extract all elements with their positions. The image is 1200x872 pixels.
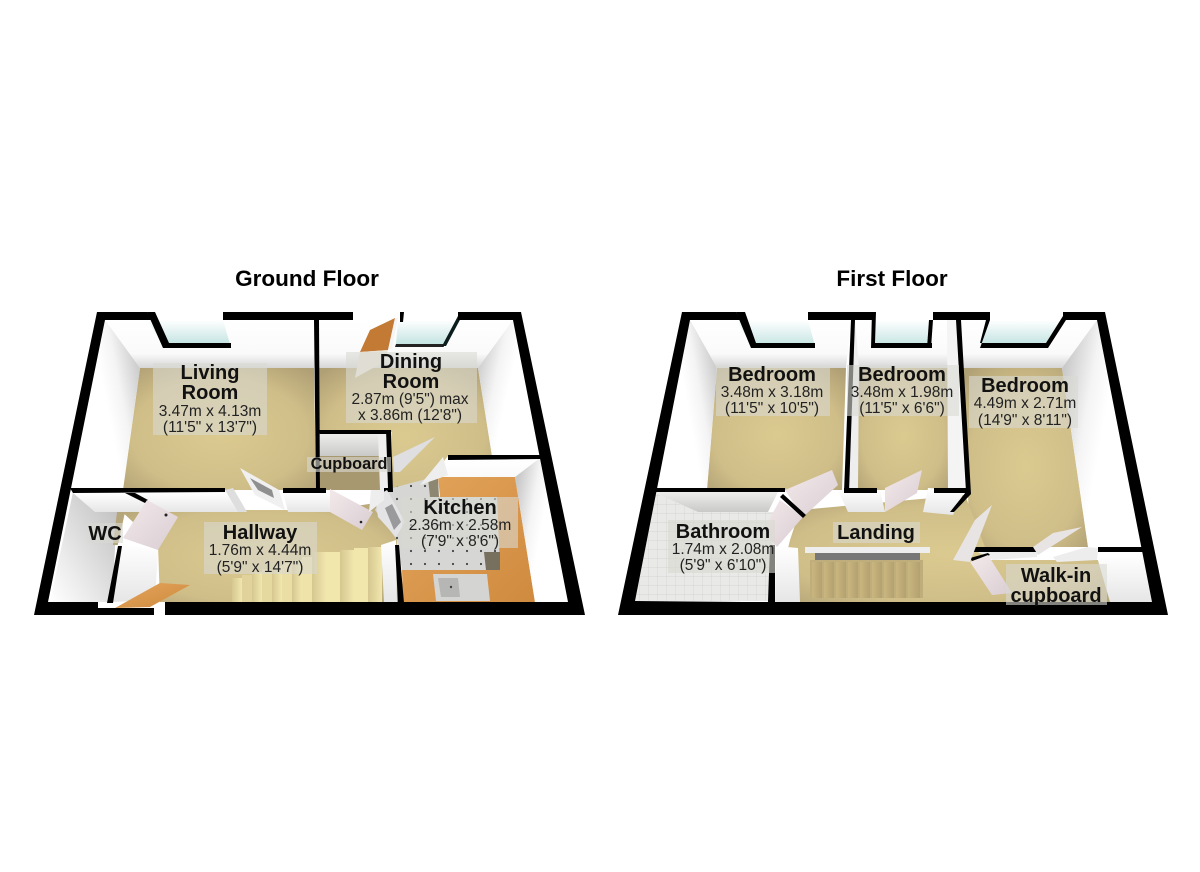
label: Living Room: 3.47m x 4.13m (159, 403, 261, 420)
door: bedroom left (785, 470, 838, 517)
outer and internal walls (34, 312, 585, 615)
window: bedroom right (981, 320, 1063, 344)
room: Kitchen (375, 458, 568, 602)
label: Dining Room: x 3.86m (12'8") (358, 407, 462, 424)
label: Bedroom middle: 3.48m x 1.98m (851, 384, 953, 401)
label: Bedroom middle: (11'5" x 6'6") (859, 400, 945, 417)
label: Kitchen: Kitchen (423, 497, 497, 519)
label: Bedroom right: (14'9" x 8'11") (978, 412, 1072, 429)
label: Bedroom right: 4.49m x 2.71m (974, 395, 1076, 412)
label: Bedroom left: 3.48m x 3.18m (721, 384, 823, 401)
label: Bedroom middle: Bedroom (858, 364, 946, 386)
label: Bathroom: Bathroom (676, 521, 770, 543)
label: Kitchen: 2.36m x 2.58m (409, 517, 511, 534)
label: Walk-in cupboard (1006, 564, 1107, 607)
door: walk-in (970, 555, 1012, 595)
label: Hallway: (5'9" x 14'7") (217, 559, 303, 576)
room: Cupboard (320, 434, 388, 490)
room: Bathroom (635, 492, 778, 601)
label: WC: WC (88, 523, 122, 545)
room: Walk-in cupboard walls (970, 547, 1152, 602)
label: Bathroom (668, 520, 775, 574)
label: Kitchen: (7'9" x 8'6") (421, 533, 499, 550)
title: First Floor: First Floor (836, 266, 948, 291)
door: hallway to cupboard (330, 489, 373, 530)
room: Dining Room (318, 316, 540, 492)
door: walk-in bedroom side (1033, 527, 1082, 555)
label: Living Room: (11'5" x 13'7") (163, 419, 257, 436)
label: Bedroom right (969, 375, 1078, 429)
label: Bedroom right: Bedroom (981, 375, 1069, 397)
label: Hallway: Hallway (223, 522, 298, 544)
window: dining room (396, 320, 458, 344)
label: Bedroom left: (11'5" x 10'5") (725, 400, 819, 417)
sink (433, 574, 490, 601)
label: Walk-in cupboard: Walk-in (1021, 565, 1091, 587)
window: living room (147, 320, 230, 344)
door: dining to kitchen (393, 437, 435, 472)
door: WC (123, 500, 178, 550)
label: Dining Room: Room (383, 371, 439, 393)
room: Bedroom left (657, 320, 851, 490)
door: bathroom (763, 494, 806, 547)
door: bedroom middle (885, 470, 922, 512)
floor plan: Ground Floor (34, 312, 585, 615)
label: Bedroom left (716, 364, 830, 417)
stairs: first floor (810, 560, 923, 598)
label: Hallway: 1.76m x 4.44m (209, 542, 311, 559)
room: WC (50, 492, 158, 602)
floor plan: First Floor (618, 312, 1168, 615)
label: Kitchen (402, 497, 518, 550)
label: Living Room: Room (182, 382, 238, 404)
label: Living Room: Living (181, 362, 239, 384)
label: Walk-in cupboard: cupboard (1010, 585, 1102, 607)
label: Bedroom middle (847, 364, 959, 417)
banister (805, 547, 930, 560)
label: Hallway (204, 522, 317, 576)
room: Landing and walk-in floor (775, 488, 1115, 602)
label: Bedroom left: Bedroom (728, 364, 816, 386)
label: Landing: Landing (837, 522, 915, 544)
label: Living Room (153, 362, 267, 436)
label: Bathroom: 1.74m x 2.08m (672, 541, 774, 558)
room: Hallway (73, 488, 400, 603)
room: Bedroom middle (849, 320, 965, 490)
door: front door (115, 583, 190, 608)
door: cupboard to kitchen (369, 490, 405, 537)
room: Living Room (73, 320, 316, 490)
title: Ground Floor: Ground Floor (235, 266, 379, 291)
window: bedroom left (736, 320, 815, 346)
window: bedroom middle (872, 320, 933, 346)
stairs: ground floor (232, 547, 382, 603)
door: dining room entrance (355, 312, 404, 378)
outer and internal walls (618, 312, 1168, 615)
label: Dining Room (346, 351, 477, 424)
door: bedroom right (953, 505, 992, 562)
label: Bathroom: (5'9" x 6'10") (680, 557, 766, 574)
door: living room (240, 468, 285, 510)
label: Cupboard: Cupboard (311, 455, 387, 473)
label: Dining Room: 2.87m (9'5") max (352, 391, 469, 408)
room: Bedroom right (961, 320, 1143, 547)
label: Dining Room: Dining (380, 351, 442, 373)
